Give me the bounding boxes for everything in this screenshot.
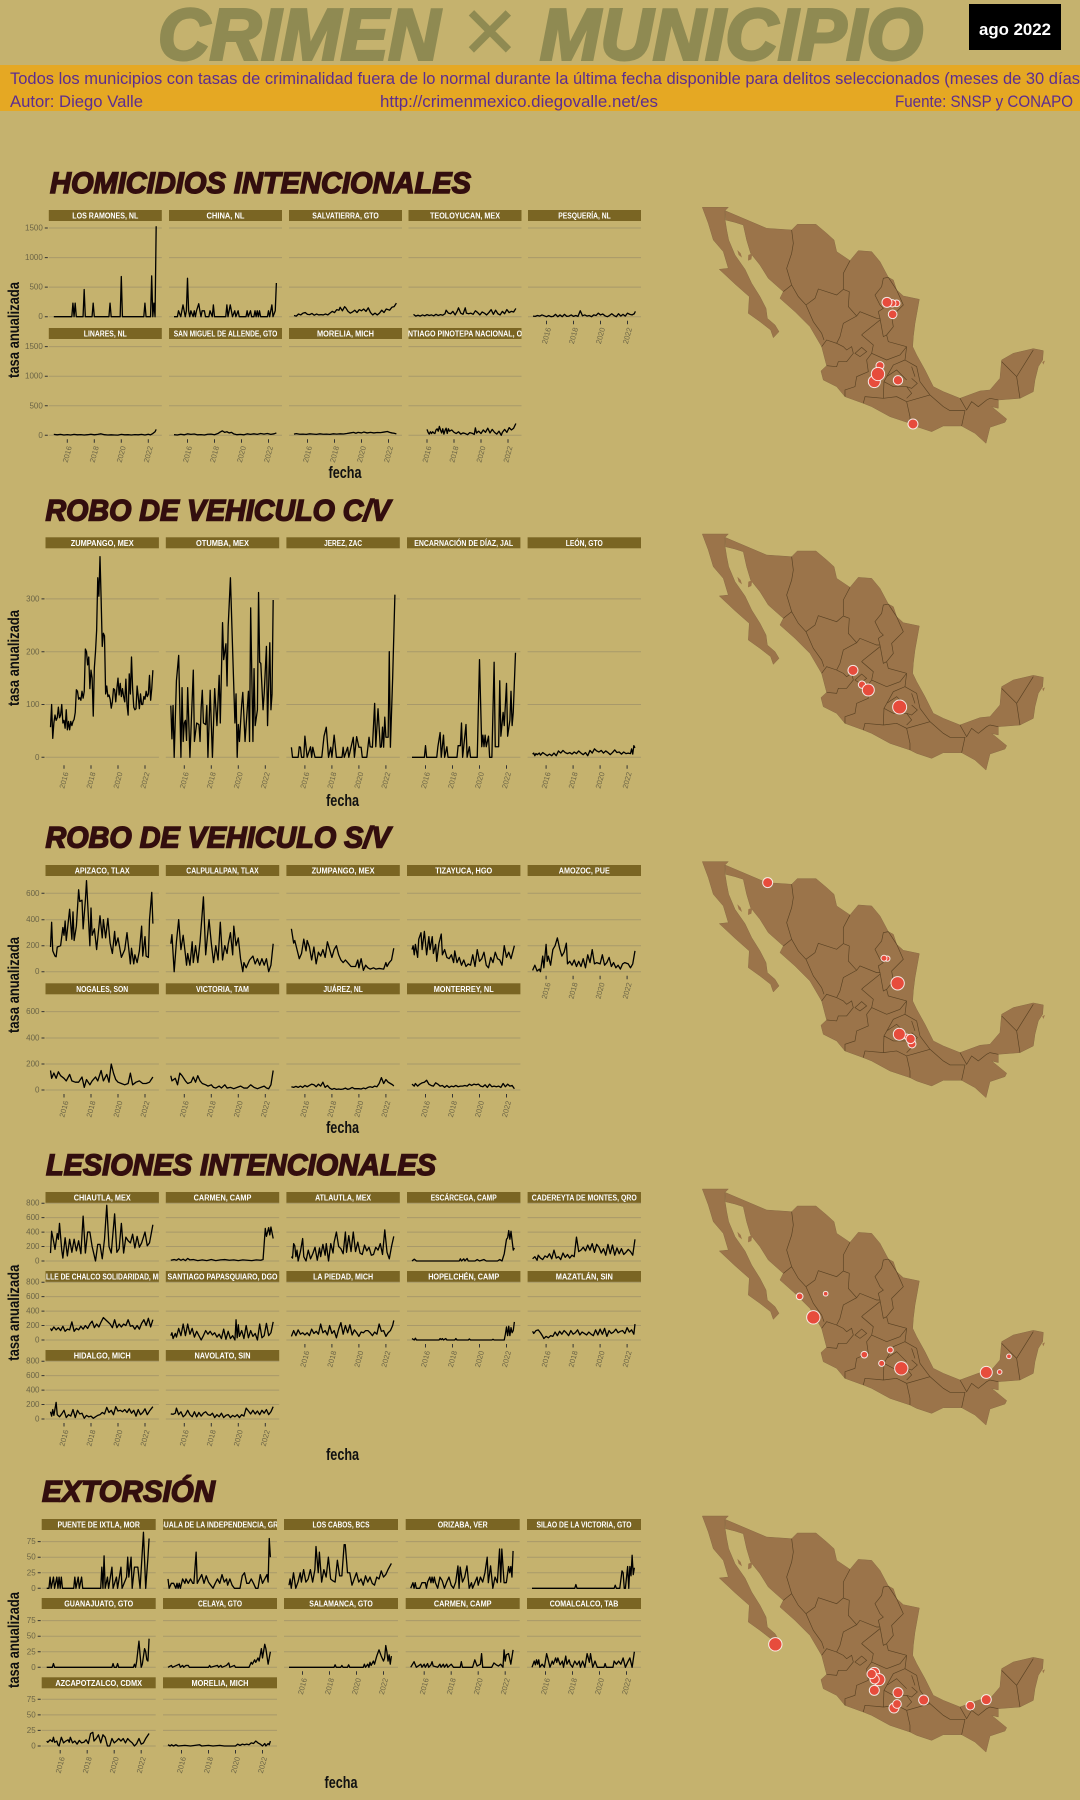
panel: Victoria: 2018 (205, 1100, 218, 1118)
panel: Linares: 2020 (115, 445, 128, 464)
panel: León (528, 537, 641, 790)
panel: Chiautla: 0 (35, 1256, 40, 1266)
panel: Morelia: 2018 (328, 445, 341, 464)
panel: Hidalgo: 800 (26, 1357, 40, 1366)
panel: Teoloyucan: TEOLOYUCAN, MEX (430, 212, 501, 221)
panel: Santiago Papasquiaro: SANTIAGO PAPASQUIARO, DGO (168, 1272, 278, 1282)
panel: Puente de Ixtla: 0 (31, 1584, 36, 1593)
panel: Escárcega: ESCÁRCEGA, CAMP (431, 1194, 497, 1202)
panel: Amozoc: 2020 (594, 981, 607, 1000)
panel: Hidalgo: 2022 (138, 1429, 152, 1447)
panel: Zumpango (26, 537, 159, 790)
panel: Zumpango: ZUMPANGO, MEX (71, 539, 134, 548)
y axis title: tasa anualizada (6, 1265, 23, 1361)
panel: Pesquería: 2022 (621, 326, 634, 345)
map: robo s/v (702, 862, 1045, 1098)
panel: Los Cabos: LOS CABOS, BCS (312, 1521, 370, 1530)
panel: Salamanca: 2022 (377, 1677, 390, 1696)
panel: Santiago Pinotepa Nacional: 2020 (474, 445, 488, 464)
panel: Linares: LINARES, NL (84, 329, 127, 338)
panel: Tizayuca: TIZAYUCA, HGO (435, 867, 492, 876)
x axis title: fecha (326, 1445, 359, 1464)
x axis title: fecha (326, 1118, 359, 1137)
panel: Azcapotzalco: 2022 (135, 1756, 148, 1774)
panel: Puente de Ixtla: 25 (27, 1568, 36, 1577)
panel: Otumba: 2022 (259, 771, 272, 790)
panel: Atlautla (286, 1192, 400, 1261)
panel: Juárez: 2016 (298, 1100, 311, 1118)
panel: Nogales: 2018 (84, 1100, 98, 1118)
panel: Nogales: 2022 (138, 1100, 152, 1118)
panel: Linares (25, 328, 162, 464)
panel: Linares: 2016 (61, 445, 74, 464)
panel: Morelia: 2022 (382, 445, 395, 464)
panel: Zumpango: 100 (26, 700, 40, 709)
panel: Azcapotzalco: AZCAPOTZALCO, CDMX (55, 1679, 143, 1688)
panel: Zumpango: 2016 (57, 771, 71, 790)
panel: Atlautla: ATLAUTLA, MEX (315, 1194, 372, 1202)
panel: Valle de Chalco Solidaridad: 800 (26, 1278, 40, 1287)
panel: Celaya (163, 1598, 277, 1667)
panel: León: 2016 (540, 771, 553, 790)
panel: Chiautla: CHIAUTLA, MEX (74, 1194, 131, 1202)
panel: Iguala de la Independencia (156, 1519, 284, 1588)
panel: Salamanca: 2018 (323, 1677, 336, 1696)
panel: Nogales (26, 983, 159, 1118)
panel: Silao de la Victoria (527, 1519, 641, 1588)
panel: Monterrey: MONTERREY, NL (434, 985, 494, 994)
panel: Juárez: 2020 (352, 1100, 365, 1118)
panel: Carmen: 2016 (418, 1677, 431, 1696)
panel: Azcapotzalco: 25 (27, 1726, 36, 1735)
panel: Guanajuato: 25 (27, 1647, 36, 1656)
panel: Carmen: 2018 (445, 1677, 458, 1696)
panel: Victoria: 2022 (259, 1100, 272, 1118)
panel: Salamanca: 2016 (296, 1677, 309, 1696)
panel: Valle de Chalco Solidaridad: 600 (26, 1292, 40, 1301)
panel: Hidalgo (26, 1350, 159, 1447)
panel: Amozoc (528, 865, 641, 1000)
map: lesiones (702, 1189, 1045, 1425)
panel: Apizaco: 600 (26, 889, 40, 898)
panel: Victoria (166, 983, 279, 1118)
panel: Azcapotzalco: 2016 (54, 1756, 67, 1774)
panel: Morelia: MORELIA, MICH (192, 1679, 249, 1688)
panel: León: 2018 (567, 771, 580, 790)
panel: Hopelchén: 2020 (473, 1350, 486, 1368)
panel: Hidalgo: 2020 (111, 1429, 125, 1447)
panel: Zumpango: 2018 (84, 771, 98, 790)
panel: Navolato (166, 1350, 279, 1447)
panel: Nogales: 2020 (111, 1100, 125, 1118)
panel: Salvatierra: SALVATIERRA, GTO (312, 212, 379, 221)
panel: Monterrey (407, 983, 520, 1118)
panel: La Piedad: LA PIEDAD, MICH (313, 1272, 373, 1282)
panel: Linares: 0 (38, 431, 43, 440)
panel: León: LEÓN, GTO (566, 539, 603, 548)
panel: Chiautla: 400 (26, 1228, 40, 1237)
panel: Los Ramones: 1500 (25, 224, 43, 233)
panel: China (169, 210, 282, 317)
panel: Hidalgo: 2016 (57, 1429, 71, 1447)
panel: Puente de Ixtla: 75 (27, 1537, 36, 1546)
x axis title: fecha (324, 1773, 358, 1792)
panel: Valle de Chalco Solidaridad: 400 (26, 1307, 40, 1316)
panel: Santiago Papasquiaro (166, 1271, 279, 1340)
panel: Hopelchén (407, 1271, 520, 1368)
panel: Linares: 2018 (88, 445, 101, 464)
panel: Monterrey: 2022 (500, 1100, 513, 1118)
panel: Nogales: NOGALES, SON (76, 985, 128, 994)
panel: Victoria: 2020 (232, 1100, 245, 1118)
panel: Morelia: 2018 (202, 1756, 215, 1774)
panel: Santiago Pinotepa Nacional: 2018 (447, 445, 461, 464)
panel: Guanajuato: 75 (27, 1616, 36, 1625)
panel: Silao de la Victoria: SILAO DE LA VICTORIA, GTO (536, 1521, 632, 1530)
panel: Santiago Pinotepa Nacional (398, 328, 533, 464)
panel: Victoria: 2016 (178, 1100, 191, 1118)
panel: Zumpango: 2020 (111, 771, 125, 790)
panel: Pesquería (528, 210, 641, 345)
panel: Salamanca: 2020 (350, 1677, 363, 1696)
panel: Guanajuato: 50 (27, 1632, 36, 1641)
panel: Mazatlán (528, 1271, 641, 1368)
panel: Azcapotzalco: 50 (27, 1710, 36, 1719)
panel: Encarnación de Díaz (407, 537, 520, 790)
panel: Hopelchén: 2018 (446, 1350, 459, 1368)
panel: Chiautla: 600 (26, 1213, 40, 1222)
panel: Comalcalco (527, 1598, 641, 1696)
panel: Linares: 2022 (142, 445, 155, 464)
panel: Hidalgo: HIDALGO, MICH (74, 1352, 131, 1360)
panel: Salvatierra (289, 210, 402, 317)
panel: Apizaco: 0 (35, 967, 40, 976)
panel: Salamanca (284, 1598, 398, 1696)
panel: Amozoc: 2022 (621, 981, 634, 1000)
panel: Chiautla: 200 (26, 1242, 40, 1251)
panel: León: 2020 (594, 771, 607, 790)
panel: Valle de Chalco Solidaridad: 0 (35, 1336, 40, 1344)
panel: Juárez: JUÁREZ, NL (323, 985, 363, 994)
panel: Navolato: NAVOLATO, SIN (195, 1352, 251, 1360)
y axis title: tasa anualizada (6, 937, 23, 1033)
panel: La Piedad: 2018 (325, 1350, 338, 1368)
panel: Apizaco (26, 865, 159, 976)
panel: Monterrey: 2016 (419, 1100, 432, 1118)
panel: Mazatlán: MAZATLÁN, SIN (556, 1272, 613, 1282)
header band: Autor: Diego Valle (10, 92, 143, 111)
panel: Puente de Ixtla: 50 (27, 1553, 36, 1562)
panel: Guanajuato: 0 (31, 1663, 36, 1672)
map: robo c/v (702, 534, 1045, 770)
panel: Encarnación de Díaz: 2018 (446, 771, 459, 790)
panel: Escárcega (407, 1192, 520, 1261)
panel: Morelia: MORELIA, MICH (317, 329, 374, 338)
panel: Mazatlán: 2016 (540, 1350, 553, 1368)
section: robo de vehiculo c/v (6, 495, 1045, 810)
panel: Puente de Ixtla: PUENTE DE IXTLA, MOR (57, 1521, 140, 1530)
panel: Morelia: 2020 (229, 1756, 242, 1774)
panel: Los Ramones (25, 210, 162, 321)
panel: Hopelchén: 2016 (419, 1350, 432, 1368)
panel: Chiautla (26, 1192, 159, 1266)
panel: Linares: 500 (29, 401, 43, 410)
panel: Los Ramones: 500 (29, 283, 43, 292)
panel: Apizaco: APIZACO, TLAX (75, 867, 130, 876)
panel: Tizayuca (407, 865, 520, 972)
panel: Carmen (166, 1192, 279, 1261)
header band: Todos los municipios con tasas de criminalidad fuera de lo normal durante la última fecha disponible para delitos seleccionados (meses de 30 días (10, 69, 1080, 88)
panel: Carmen (406, 1598, 520, 1696)
panel: Salamanca: SALAMANCA, GTO (309, 1600, 373, 1609)
panel: Linares: 1500 (25, 342, 43, 351)
panel: Monterrey: 2018 (446, 1100, 459, 1118)
panel: Zumpango: 300 (26, 594, 40, 603)
panel: Jerez: 2016 (298, 771, 311, 790)
panel: Carmen: 2022 (499, 1677, 512, 1696)
panel: Carmen: 2020 (472, 1677, 485, 1696)
panel: Nogales: 2016 (57, 1100, 71, 1118)
panel: San Miguel de Allende: 2020 (235, 445, 248, 464)
panel: Guanajuato: GUANAJUATO, GTO (64, 1600, 133, 1609)
panel: Hidalgo: 0 (35, 1414, 40, 1424)
panel: Orizaba: ORIZABA, VER (438, 1521, 488, 1530)
panel: Monterrey: 2020 (473, 1100, 486, 1118)
heading: HOMICIDIOS INTENCIONALES (50, 167, 471, 200)
panel: La Piedad: 2020 (352, 1350, 365, 1368)
panel: La Piedad (286, 1271, 400, 1368)
panel: Navolato: 2022 (259, 1429, 272, 1447)
panel: Calpulalpan: CALPULALPAN, TLAX (186, 867, 259, 876)
panel: Mazatlán: 2022 (621, 1350, 634, 1368)
panel: Mazatlán: 2020 (594, 1350, 607, 1368)
panel: La Piedad: 2022 (379, 1350, 392, 1368)
panel: Chiautla: 800 (26, 1199, 40, 1208)
y axis title: tasa anualizada (6, 282, 23, 378)
panel: Nogales: 200 (26, 1060, 40, 1068)
panel: San Miguel de Allende: 2022 (262, 445, 275, 464)
panel: Comalcalco: 2016 (539, 1677, 552, 1696)
map: extorsión (702, 1516, 1045, 1752)
panel: Hopelchén: HOPELCHÉN, CAMP (428, 1272, 500, 1282)
panel: Nogales: 0 (35, 1086, 40, 1094)
panel: Hopelchén: 2022 (500, 1350, 513, 1368)
panel: Comalcalco: 2018 (566, 1677, 579, 1696)
panel: Morelia: 2020 (355, 445, 368, 464)
date badge: ago 2022 (979, 20, 1051, 39)
x axis title: fecha (328, 463, 362, 482)
panel: Celaya: CELAYA, GTO (198, 1600, 242, 1609)
panel: Encarnación de Díaz: 2020 (473, 771, 486, 790)
panel: Comalcalco: 2022 (620, 1677, 633, 1696)
panel: Azcapotzalco: 0 (31, 1742, 36, 1750)
panel: Hidalgo: 600 (26, 1371, 40, 1380)
panel: Hidalgo: 2018 (84, 1429, 98, 1447)
panel: Navolato: 2018 (205, 1429, 218, 1447)
panel: Cadereyta de Montes: CADEREYTA DE MONTES, QRO (532, 1194, 637, 1202)
panel: Los Ramones: 0 (38, 312, 43, 321)
panel: Orizaba (406, 1519, 520, 1588)
panel: San Miguel de Allende: SAN MIGUEL DE ALLENDE, GTO (174, 329, 277, 338)
heading: EXTORSIÓN (42, 1475, 216, 1509)
panel: Jerez: 2020 (352, 771, 365, 790)
panel: Los Ramones: 1000 (25, 253, 43, 262)
panel: Otumba: OTUMBA, MEX (196, 539, 250, 548)
section: robo de vehiculo s/v (6, 822, 1045, 1137)
panel: Morelia: 2022 (256, 1756, 269, 1774)
panel: San Miguel de Allende: 2018 (208, 445, 221, 464)
panel: Zumpango (286, 865, 400, 972)
panel: Linares: 1000 (25, 372, 43, 381)
panel: Calpulalpan (166, 865, 279, 972)
panel: Guanajuato (27, 1598, 156, 1672)
panel: Zumpango: 200 (26, 647, 40, 656)
panel: León: 2022 (621, 771, 634, 790)
panel: Los Cabos (284, 1519, 398, 1588)
panel: Amozoc: 2018 (567, 981, 580, 1000)
panel: Encarnación de Díaz: 2022 (500, 771, 513, 790)
panel: Azcapotzalco: 2018 (81, 1756, 94, 1774)
panel: Morelia: 2016 (175, 1756, 188, 1774)
panel: Jerez: 2022 (379, 771, 392, 790)
panel: Juárez (286, 983, 400, 1118)
panel: Pesquería: 2018 (567, 326, 580, 345)
panel: Nogales: 600 (26, 1007, 40, 1016)
panel: Victoria: VICTORIA, TAM (196, 985, 249, 994)
panel: Los Ramones: LOS RAMONES, NL (72, 212, 138, 221)
panel: Pesquería: PESQUERÍA, NL (558, 212, 611, 221)
section: extorsión (6, 1475, 1045, 1792)
panel: Carmen: CARMEN, CAMP (434, 1600, 492, 1609)
panel: Azcapotzalco: 75 (27, 1695, 36, 1704)
panel: Pesquería: 2016 (540, 326, 553, 345)
header band: http://crimenmexico.diegovalle.net/es (380, 92, 658, 111)
panel: Nogales: 400 (26, 1034, 40, 1042)
panel: Mazatlán: 2018 (567, 1350, 580, 1368)
x axis title: fecha (326, 791, 359, 810)
header band (0, 65, 1080, 111)
heading: ROBO DE VEHICULO C/V (46, 495, 393, 528)
panel: Morelia (163, 1677, 277, 1774)
panel: Hidalgo: 200 (26, 1400, 40, 1409)
panel: Zumpango: 0 (35, 753, 40, 762)
section: homicidios intencionales (6, 167, 1045, 482)
panel: Otumba: 2018 (205, 771, 218, 790)
panel: Otumba (166, 537, 279, 790)
heading: ROBO DE VEHICULO S/V (46, 822, 393, 854)
panel: San Miguel de Allende: 2016 (181, 445, 194, 464)
panel: Morelia: 2016 (301, 445, 314, 464)
panel: Zumpango: ZUMPANGO, MEX (312, 867, 375, 876)
panel: La Piedad: 2016 (298, 1350, 311, 1368)
panel: Otumba: 2020 (232, 771, 245, 790)
section: lesiones intencionales (6, 1149, 1045, 1464)
panel: Otumba: 2016 (178, 771, 191, 790)
panel: Puente de Ixtla (27, 1519, 156, 1593)
panel: Cadereyta de Montes (528, 1192, 641, 1261)
panel: Pesquería: 2020 (594, 326, 607, 345)
panel: Hidalgo: 400 (26, 1386, 40, 1395)
panel: Morelia (289, 328, 402, 464)
panel: Juárez: 2018 (325, 1100, 338, 1118)
map: homicidios (702, 207, 1045, 443)
panel: China: CHINA, NL (206, 212, 245, 221)
panel: Carmen: CARMEN, CAMP (194, 1194, 252, 1202)
panel: Juárez: 2022 (379, 1100, 392, 1118)
panel: Azcapotzalco: 2020 (108, 1756, 121, 1774)
panel: Santiago Pinotepa Nacional: 2022 (501, 445, 515, 464)
panel: Zumpango: 2022 (138, 771, 152, 790)
panel: Jerez (286, 537, 400, 790)
panel: Apizaco: 400 (26, 915, 40, 924)
panel: Jerez: JEREZ, ZAC (324, 539, 362, 548)
panel: Valle de Chalco Solidaridad: 200 (26, 1321, 40, 1330)
panel: Valle de Chalco Solidaridad (26, 1271, 168, 1344)
title (158, 0, 923, 82)
heading: LESIONES INTENCIONALES (46, 1149, 436, 1182)
panel: Jerez: 2018 (325, 771, 338, 790)
y axis title: tasa anualizada (6, 1592, 23, 1688)
panel: Encarnación de Díaz: ENCARNACIÓN DE DÍAZ, JAL (414, 539, 513, 548)
date badge (969, 4, 1061, 50)
panel: Teoloyucan (408, 210, 522, 317)
panel: Navolato: 2020 (232, 1429, 245, 1447)
panel: Encarnación de Díaz: 2016 (419, 771, 432, 790)
panel: Azcapotzalco (27, 1677, 156, 1774)
panel: Amozoc: AMOZOC, PUE (559, 867, 610, 876)
panel: Santiago Pinotepa Nacional: 2016 (420, 445, 434, 464)
panel: Navolato: 2016 (178, 1429, 191, 1447)
panel: San Miguel de Allende (169, 328, 282, 464)
panel: Comalcalco: COMALCALCO, TAB (550, 1600, 618, 1609)
panel: Amozoc: 2016 (540, 981, 553, 1000)
y axis title: tasa anualizada (6, 610, 23, 706)
panel: Comalcalco: 2020 (593, 1677, 606, 1696)
panel: Apizaco: 200 (26, 941, 40, 950)
